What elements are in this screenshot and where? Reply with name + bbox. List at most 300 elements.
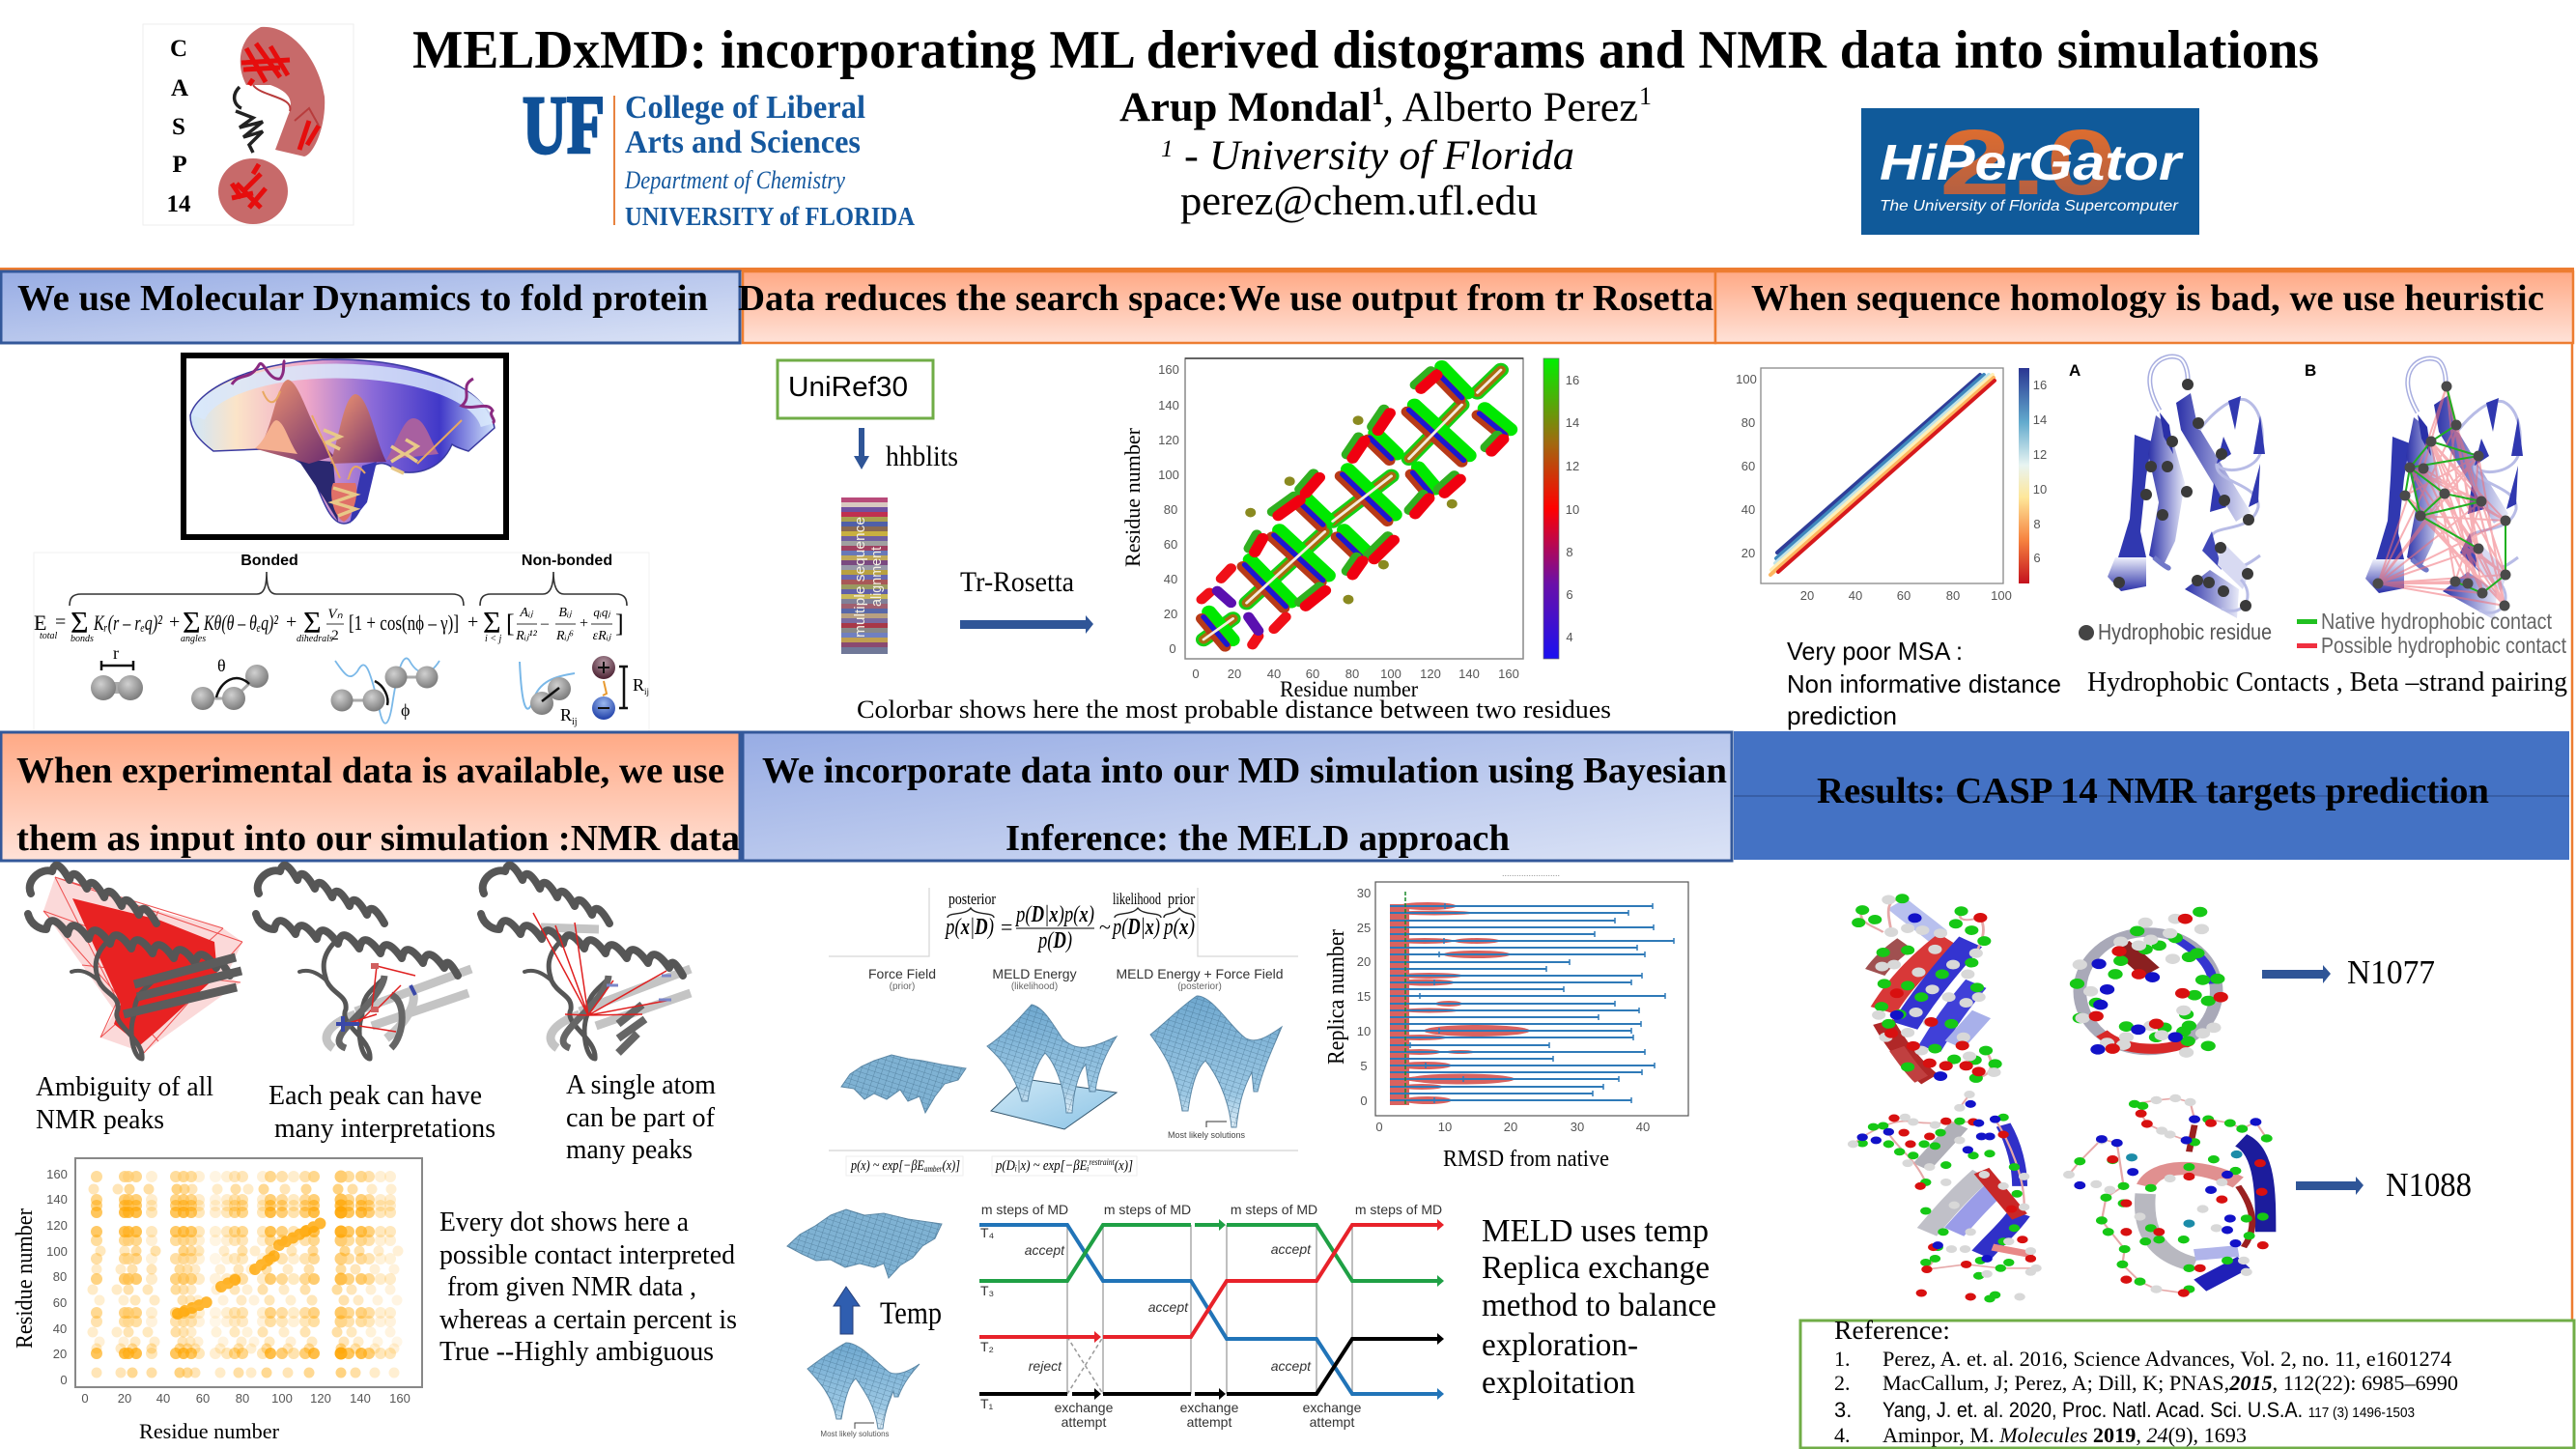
equation: +: [467, 611, 478, 633]
colorbar: 16: [1566, 373, 1579, 387]
axis ticks: 20: [1504, 1120, 1517, 1134]
captions: NMR proteins: can be part of: [566, 1103, 716, 1133]
exchange attempt labels: exchange: [1303, 1400, 1362, 1415]
CASP 14 vertical letters: C: [170, 36, 187, 62]
reference 3: Yang, J. et. al. 2020, Proc. Natl. Acad. Sci. U.S.A. 117 (3) 1496-1503: [1882, 1398, 2415, 1422]
text: every dot shows: from given NMR data ,: [447, 1272, 696, 1302]
text: every dot shows: possible contact interpreted: [439, 1240, 735, 1270]
text: every dot shows: whereas a certain percent is: [439, 1305, 737, 1335]
chart: replica exchange diagram: [979, 1202, 1444, 1430]
axis ticks: 60: [1306, 667, 1319, 681]
angle diagram: θ: [217, 656, 226, 675]
folding helices on funnel: [324, 430, 417, 516]
ticks: 20: [1741, 546, 1755, 560]
step labels: [981, 1202, 1442, 1217]
equation: ]: [615, 610, 624, 638]
surface: posterior: Most likely solutions: [1168, 1130, 1246, 1140]
heading: results: [1734, 731, 2569, 860]
reference 1: Perez, A. et. al. 2016, Science Advances, Vol. 2, no. 11, e1601274: [1882, 1347, 2451, 1371]
CASP 14 vertical letters: 14: [166, 191, 191, 217]
UF college text: UNIVERSITY of FLORIDA: [625, 202, 915, 231]
heading: molecular dynamics: We use Molecular Dynamics to fold protein: [17, 278, 708, 319]
axis ticks: [1158, 362, 1519, 681]
text: very poor MSA: Very poor MSA :: [1787, 637, 1963, 666]
equation: Rᵢⱼ⁶: [555, 629, 574, 643]
axis ticks: 30: [1357, 886, 1371, 900]
text: MELD uses temp replica exchange: [1482, 1213, 1716, 1401]
residue dots: [2119, 384, 2249, 606]
ticks: 40: [1741, 502, 1755, 517]
axis ticks: 60: [53, 1295, 67, 1310]
axis ticks: [1357, 886, 1650, 1134]
axis ticks: 60: [196, 1391, 210, 1406]
equation: 2: [331, 628, 339, 643]
heading: data reduces search space: [738, 271, 1715, 343]
text: MELD uses temp replica exchange: Replica exchange: [1482, 1250, 1710, 1286]
panel: Bayes formula: [829, 888, 1298, 956]
reference 4: Aminpor, M. Molecules 2019, 24(9), 1693: [1882, 1423, 2247, 1447]
axis ticks: 10: [1357, 1024, 1371, 1038]
arrow: Rosetta to map: [960, 615, 1093, 634]
axis labels: Replica number: [1324, 929, 1349, 1065]
surface: likelihood: [987, 1005, 1117, 1129]
axis ticks: 0: [60, 1373, 68, 1387]
chart: poor MSA distance map: 6: [2033, 551, 2041, 565]
axis ticks: 0: [1169, 641, 1176, 656]
heading: data reduces search space: Data reduces the search space:We use output from tr Rosetta: [738, 278, 1713, 319]
protein: N1077 side view: [1858, 898, 1996, 1079]
UF college text: [624, 90, 915, 231]
title: MELDxMD: incorporating ML derived distograms and NMR data into simulations: [412, 20, 2319, 80]
chart: replica violin plot: RMSD from native: [1443, 1147, 1609, 1172]
axis ticks: 40: [1267, 667, 1281, 681]
diagonal band: [1770, 375, 1995, 575]
captions: NMR proteins: A single atom: [566, 1070, 716, 1100]
axis ticks: 0: [81, 1391, 89, 1406]
chart: predicted distogram contact map: [1120, 358, 1579, 701]
colorbar: [1543, 358, 1579, 659]
exchange attempt labels: exchange: [1180, 1400, 1239, 1415]
ticks: 60: [1741, 459, 1755, 473]
equation: =: [55, 611, 66, 633]
axis ticks: 20: [1228, 667, 1241, 681]
equation: Σ: [71, 605, 89, 639]
label: Bonded: Bonded: [241, 553, 298, 569]
axis ticks: 80: [1345, 667, 1359, 681]
authors: 1: [1372, 82, 1384, 110]
panel: hydrophobic contacts B: [2297, 358, 2567, 658]
axis ticks: 140: [1158, 398, 1179, 412]
equation: Bᵢⱼ: [558, 606, 573, 620]
UF logo: UF: [523, 78, 605, 171]
axis ticks: 160: [1158, 362, 1179, 377]
tiny plot title: ........................: [1502, 868, 1560, 878]
equation: Vₙ: [327, 607, 344, 622]
axis ticks: 120: [1420, 667, 1441, 681]
label: Temp: Temp: [880, 1296, 942, 1331]
axis ticks: 0: [1192, 667, 1200, 681]
formula: likelihood: p(Dᵢ|x) ~ exp[−βEᵢ: [996, 1158, 1105, 1174]
column titles: Force Field: [868, 966, 936, 981]
arrow: temperature up: [834, 1287, 860, 1334]
violins: [1390, 902, 1530, 1105]
CASP 14 vertical letters: [166, 36, 191, 217]
axis ticks: 120: [310, 1391, 331, 1406]
column titles: (likelihood): [1011, 981, 1058, 992]
equation: Σ: [183, 605, 201, 639]
accept and reject labels: [1025, 1241, 1312, 1374]
surface: posterior: [1150, 996, 1282, 1140]
angle diagram: [191, 656, 269, 710]
temperature labels: T₂: [980, 1339, 994, 1354]
ticks: [1736, 372, 2012, 603]
arrow: down to MSA: [854, 428, 869, 469]
axis ticks: 20: [53, 1347, 67, 1361]
CASP 14 vertical letters: S: [172, 114, 185, 140]
equation: –: [540, 615, 550, 632]
UF logo: [523, 78, 915, 231]
axis ticks: 160: [1498, 667, 1519, 681]
column titles: (posterior): [1177, 981, 1222, 992]
colorbar: 8: [1566, 545, 1573, 559]
reference 4: 4.: [1834, 1423, 1851, 1447]
captions: NMR proteins: many peaks: [566, 1135, 693, 1165]
text: MELD uses temp replica exchange: exploitation: [1482, 1365, 1635, 1401]
HiPerGator logo: The University of Florida Supercomputer: [1880, 198, 2179, 214]
exchange attempt labels: attempt: [1062, 1414, 1106, 1430]
CASP 14 vertical letters: A: [171, 75, 188, 101]
text: MELD uses temp replica exchange: MELD uses temp: [1482, 1213, 1709, 1249]
legend: native and possible contacts: [2297, 609, 2567, 658]
protein: N1088 top view: [2069, 1098, 2267, 1293]
legend: hydrophobic residue: Hydrophobic residue: [2098, 619, 2272, 644]
panel: Bayes formula: p(D|x): [1111, 915, 1160, 940]
equation: Σ: [483, 605, 501, 639]
axis ticks: 40: [53, 1321, 67, 1336]
temperature labels: T₁: [980, 1396, 994, 1411]
arrow: to N1088: [2296, 1177, 2364, 1195]
heading: heuristic: When sequence homology is bad, we use heuristic: [1751, 278, 2544, 319]
axis ticks: 80: [1164, 502, 1177, 517]
CASP 14 vertical letters: P: [172, 152, 187, 178]
axis ticks: 20: [1164, 607, 1177, 621]
strip caption: alignment: [868, 546, 885, 607]
scatter dots: [87, 1171, 404, 1378]
caption: colorbar: Colorbar shows here the most probable distance between two residues: [857, 696, 1611, 724]
panel: Bayes formula: ~: [1099, 915, 1111, 939]
protein: N1088 side view: [1854, 1094, 2036, 1298]
strip caption: multiple sequence: [852, 517, 868, 638]
arrow: to N1077: [2262, 965, 2331, 983]
column titles: MELD Energy: [992, 966, 1077, 981]
exchange attempt labels: [1055, 1400, 1362, 1430]
chart: poor MSA distance map: 12: [2033, 447, 2047, 462]
equation: i < j: [485, 634, 502, 644]
axis ticks: 60: [1164, 537, 1177, 552]
exchange lines: [979, 1219, 1444, 1400]
accept and reject labels: accept: [1271, 1241, 1312, 1257]
panel: references: [1800, 1316, 2574, 1448]
captions: NMR proteins: many interpretations: [274, 1114, 495, 1144]
axis ticks: 120: [1158, 433, 1179, 447]
formula: prior: amber: [924, 1164, 943, 1174]
chart: poor MSA distance map: 16: [2033, 378, 2047, 392]
panel: hydrophobic contacts B: B: [2305, 361, 2316, 380]
exchange attempt labels: attempt: [1310, 1414, 1354, 1430]
colorbar: 4: [1566, 630, 1573, 644]
chart: poor MSA distance map: 10: [2033, 482, 2047, 497]
equation: total: [40, 631, 58, 641]
ticks: 80: [1946, 588, 1960, 603]
heading: experimental data: When experimental data is available, we use: [16, 751, 724, 791]
captions: NMR proteins: NMR peaks: [36, 1105, 164, 1135]
formula: likelihood: [992, 1156, 1137, 1176]
axis ticks: 25: [1357, 921, 1371, 935]
authors: [1119, 82, 1652, 224]
panel: Bayes formula: p(D|x)p(x): [1014, 902, 1094, 927]
column titles: [868, 966, 1284, 992]
text: very poor MSA: Non informative distance: [1787, 669, 2061, 698]
axis ticks: 80: [236, 1391, 249, 1406]
chart: poor MSA distance map: 8: [2033, 517, 2041, 531]
equation: Rᵢⱼ¹²: [515, 629, 538, 643]
equation: Kθ(θ – θₑq)²: [203, 611, 278, 635]
temperature labels: T₃: [980, 1283, 994, 1298]
equation: [34, 605, 624, 644]
ticks: 20: [1800, 588, 1814, 603]
axis ticks: 20: [1357, 954, 1371, 969]
colorbar: 14: [1566, 415, 1579, 430]
affiliation: 1: [1161, 136, 1173, 162]
bond stretch diagram: r: [113, 643, 119, 663]
residue dots: [2378, 386, 2505, 606]
van der Waals diagram: R: [560, 705, 572, 724]
authors: , Alberto Perez: [1383, 85, 1638, 130]
panel: Bayes formula: likelihood: [1113, 890, 1161, 908]
van der Waals diagram: [520, 662, 578, 727]
panel: UniRef30 box: UniRef30: [788, 372, 908, 403]
CASP 14 logo: [143, 24, 354, 225]
UF college text: Arts and Sciences: [625, 125, 861, 160]
dihedral diagram: [330, 658, 439, 724]
heading: heuristic: [1715, 271, 2573, 343]
panel: Bayes formula: p(D): [1036, 928, 1072, 953]
axis ticks: 5: [1360, 1059, 1368, 1073]
equation: Aᵢⱼ: [519, 606, 534, 620]
label: Non-bonded: Non-bonded: [522, 553, 612, 569]
axis ticks: 0: [1360, 1094, 1368, 1108]
captions: NMR proteins: Ambiguity of all: [36, 1072, 213, 1102]
step labels: m steps of MD: [1104, 1202, 1191, 1217]
medians and whiskers: [1390, 903, 1674, 1103]
equation: E: [34, 611, 46, 635]
native reference line: [1404, 892, 1406, 1105]
chart: NMR ambiguous contact scatter: [13, 1158, 422, 1443]
formula: prior: p(x) ~ exp[−βE: [851, 1158, 941, 1174]
UF college text: Department of Chemistry: [624, 166, 845, 194]
heading: Bayesian inference: We incorporate data into our MD simulation using Bayesian: [762, 751, 1727, 791]
text: every dot shows: [439, 1208, 737, 1367]
axis ticks: 140: [350, 1391, 371, 1406]
axis ticks: 40: [1164, 572, 1177, 586]
temperature labels: T₄: [980, 1225, 995, 1240]
panel: Bayes formula: p(x|D): [944, 915, 994, 940]
heading: Bayesian inference: Inference: the MELD approach: [1005, 818, 1510, 859]
equation: +: [580, 615, 588, 632]
equation: [1 + cos(nϕ – γ)]: [349, 611, 459, 635]
contact bands: [1202, 367, 1511, 646]
label: N1088: N1088: [2386, 1166, 2472, 1204]
reference 3: 3.: [1834, 1398, 1852, 1422]
equation: +: [169, 611, 180, 633]
formula: prior: [846, 1156, 963, 1176]
ticks: 100: [1991, 588, 2012, 603]
equation: +: [286, 611, 297, 633]
chart: NMR ambiguous contact scatter: Residue number: [139, 1419, 280, 1443]
axis ticks: 140: [1458, 667, 1480, 681]
chart: poor MSA distance map: 14: [2033, 412, 2047, 427]
email: perez@chem.ufl.edu: [1180, 179, 1538, 224]
exchange attempt labels: attempt: [1187, 1414, 1231, 1430]
axis ticks: 160: [389, 1391, 410, 1406]
authors: - University of Florida: [1184, 133, 1574, 179]
panel: Bayes formula: posterior: [948, 890, 996, 908]
panel: force field equation: [34, 553, 649, 731]
chart: predicted distogram contact map: Residue number: [1280, 677, 1418, 701]
axis ticks: 40: [156, 1391, 170, 1406]
heading: experimental data: [1, 732, 740, 861]
text: every dot shows: Every dot shows here a: [439, 1208, 690, 1237]
captions: NMR proteins: [36, 1070, 716, 1165]
accept and reject labels: accept: [1025, 1242, 1065, 1258]
equation: dihedrals: [297, 634, 333, 644]
equation: angles: [181, 634, 206, 644]
heading: molecular dynamics: [1, 271, 740, 343]
ticks: 80: [1741, 415, 1755, 430]
panel: UniRef30 box: [778, 360, 933, 418]
top section rule and right edge: [0, 268, 2574, 271]
protein: each peak interpretations: [256, 866, 471, 1059]
axis ticks: 15: [1357, 989, 1371, 1004]
exchange attempt labels: exchange: [1055, 1400, 1114, 1415]
equation: Kᵣ(r – rₑq)²: [93, 611, 162, 635]
colorbar: 6: [1566, 587, 1573, 602]
panel: hydrophobic residues A: A: [2069, 361, 2081, 380]
accept and reject labels: accept: [1148, 1299, 1189, 1315]
axis ticks: 160: [46, 1167, 68, 1181]
text: hydrophobic contacts caption: Hydrophobic Contacts , Beta –strand pairing: [2087, 668, 2567, 697]
colorbar: 12: [1566, 459, 1579, 473]
accept and reject labels: accept: [1271, 1358, 1312, 1374]
chart: poor MSA distance map: [1736, 368, 2047, 603]
HiPerGator logo: 2.0: [1939, 111, 2117, 214]
equation: bonds: [71, 634, 94, 644]
heading: Bayesian inference: [743, 732, 1732, 861]
van der Waals diagram: ij: [572, 717, 578, 727]
text: very poor MSA: prediction: [1787, 701, 1897, 730]
axis ticks: 100: [46, 1244, 68, 1259]
equation: εRᵢⱼ: [593, 629, 612, 643]
formula: likelihood: restraint: [1090, 1157, 1115, 1167]
text: every dot shows: True --Highly ambiguous: [439, 1337, 714, 1367]
electrostatic diagram: ij: [644, 687, 649, 696]
panel: Bayes formula: =: [1001, 915, 1012, 939]
text: very poor MSA: [1787, 637, 2061, 730]
accept and reject labels: reject: [1029, 1358, 1062, 1374]
text: MELD uses temp replica exchange: exploration-: [1482, 1327, 1638, 1363]
surface: prior: [841, 1055, 966, 1113]
axis ticks: 140: [46, 1192, 68, 1207]
axis labels: Residue number: [13, 1208, 38, 1349]
equation: [: [506, 610, 515, 638]
panel: force field surfaces: [829, 966, 1298, 1176]
panel: Bayes formula: p(x): [1162, 915, 1195, 940]
native contacts: [2405, 386, 2505, 593]
label: N1077: N1077: [2347, 953, 2435, 991]
label: Tr-Rosetta: Tr-Rosetta: [960, 566, 1074, 598]
HiPerGator logo: [1861, 108, 2199, 235]
formula: prior: (x)]: [943, 1158, 960, 1174]
multiple sequence alignment strip: [841, 497, 888, 654]
text: MELD uses temp replica exchange: method to balance: [1482, 1288, 1716, 1323]
protein model: [218, 27, 325, 224]
axis ticks: 120: [46, 1218, 68, 1233]
equation: Σ: [303, 605, 322, 639]
surface: high temperature: [787, 1209, 942, 1278]
step labels: m steps of MD: [1231, 1202, 1317, 1217]
protein: single atom many peaks: [481, 866, 691, 1059]
axis ticks: 100: [271, 1391, 293, 1406]
braces: [70, 572, 627, 606]
panel: Bayes formula: prior: [1168, 890, 1195, 908]
reference 2: MacCallum, J; Perez, A; Dill, K; PNAS,2015, 112(22): 6985–6990: [1882, 1371, 2458, 1395]
ticks: 100: [1736, 372, 1757, 386]
panel: references: Reference:: [1834, 1316, 1950, 1345]
bond stretch diagram: [91, 643, 143, 700]
ticks: 60: [1897, 588, 1911, 603]
formula: likelihood: (x)]: [1115, 1158, 1133, 1174]
axis ticks: 10: [1438, 1120, 1452, 1134]
protein: all NMR peaks: [28, 866, 242, 1059]
electrostatic diagram: [592, 656, 649, 720]
equation: qᵢqⱼ: [593, 605, 610, 619]
protein: N1077 top view: [2077, 912, 2221, 1053]
step labels: m steps of MD: [981, 1202, 1068, 1217]
column titles: (prior): [890, 981, 915, 992]
axis ticks: 80: [53, 1269, 67, 1284]
axis ticks: 30: [1571, 1120, 1584, 1134]
axis ticks: 20: [118, 1391, 131, 1406]
surface: low temperature: [807, 1343, 920, 1438]
panel: hydrophobic residues A: [2069, 356, 2272, 644]
axis ticks: 40: [1636, 1120, 1650, 1134]
authors: Arup Mondal: [1119, 85, 1372, 130]
axis ticks: 100: [1380, 667, 1401, 681]
axis ticks: 0: [1375, 1120, 1383, 1134]
panel: energy funnel: [184, 355, 506, 537]
surface: low temperature: Most likely solutions: [820, 1430, 890, 1438]
electrostatic diagram: R: [633, 675, 644, 695]
axis ticks: 100: [1158, 468, 1179, 482]
colorbar: 10: [1566, 502, 1579, 517]
possible contacts: [2378, 386, 2505, 606]
panel: temperature landscapes: [787, 1209, 942, 1438]
heading: results: Results: CASP 14 NMR targets prediction: [1817, 771, 2489, 811]
captions: NMR proteins: Each peak can have: [269, 1081, 482, 1111]
dihedral diagram: ϕ: [401, 700, 410, 720]
strip caption: [852, 517, 885, 638]
heading: experimental data: them as input into our simulation :NMR data: [16, 818, 740, 859]
